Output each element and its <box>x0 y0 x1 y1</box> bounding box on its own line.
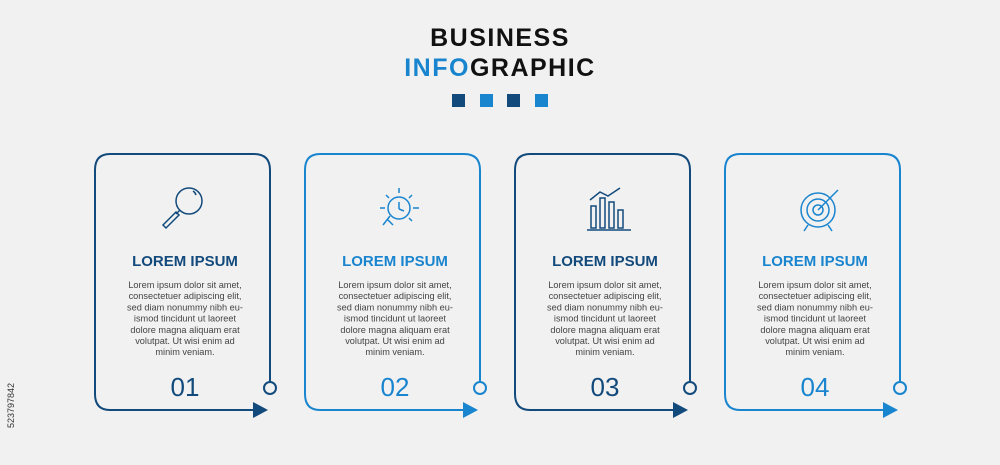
icon: bar chart <box>587 188 631 230</box>
side id text: 523797842 <box>6 383 16 428</box>
text block 3: dolore magna aliquam erat <box>550 325 660 335</box>
text block 2: dolore magna aliquam erat <box>340 325 450 335</box>
text block 1: dolore magna aliquam erat <box>130 325 240 335</box>
text block 4: sed diam nonummy nibh eu- <box>757 302 873 312</box>
title <box>404 24 596 82</box>
text block 4: volutpat. Ut wisi enim ad <box>765 336 865 346</box>
text block 3: consectetuer adipiscing elit, <box>549 291 661 301</box>
text block 3: minim veniam. <box>575 347 635 357</box>
text block 2: Lorem ipsum dolor sit amet, <box>338 280 452 290</box>
squares decoration <box>452 94 548 107</box>
icon: magnifier <box>163 188 202 228</box>
text block 1: sed diam nonummy nibh eu- <box>127 302 243 312</box>
icon: lightbulb <box>380 188 419 225</box>
text block 2: consectetuer adipiscing elit, <box>339 291 451 301</box>
text block 1: volutpat. Ut wisi enim ad <box>135 336 235 346</box>
text block 3: sed diam nonummy nibh eu- <box>547 302 663 312</box>
text block 3: Lorem ipsum dolor sit amet, <box>548 280 662 290</box>
text block 1: Lorem ipsum dolor sit amet, <box>128 280 242 290</box>
number 04: 04 <box>801 372 829 402</box>
heading 2: LOREM IPSUM <box>342 253 448 270</box>
title: INFOGRAPHIC <box>404 54 596 82</box>
heading 4: LOREM IPSUM <box>762 253 868 270</box>
text block 4: consectetuer adipiscing elit, <box>759 291 871 301</box>
text block 2: volutpat. Ut wisi enim ad <box>345 336 445 346</box>
title: BUSINESS <box>430 24 570 52</box>
text block 4: Lorem ipsum dolor sit amet, <box>758 280 872 290</box>
icon: target <box>801 190 838 231</box>
number 02: 02 <box>381 372 409 402</box>
panel: card 4 <box>725 154 906 418</box>
text block 4: ismod tincidunt ut laoreet <box>764 314 867 324</box>
text block 1: consectetuer adipiscing elit, <box>129 291 241 301</box>
panel: card 2 <box>305 154 486 418</box>
text block 3: volutpat. Ut wisi enim ad <box>555 336 655 346</box>
text block 4: minim veniam. <box>785 347 845 357</box>
text block 2: ismod tincidunt ut laoreet <box>344 314 447 324</box>
text block 1: minim veniam. <box>155 347 215 357</box>
text block 1: ismod tincidunt ut laoreet <box>134 314 237 324</box>
text block 2: sed diam nonummy nibh eu- <box>337 302 453 312</box>
heading 1: LOREM IPSUM <box>132 253 238 270</box>
text block 3: ismod tincidunt ut laoreet <box>554 314 657 324</box>
panel: card 3 <box>515 154 696 418</box>
panel: card 1 <box>95 154 276 418</box>
text block 4: dolore magna aliquam erat <box>760 325 870 335</box>
text block 2: minim veniam. <box>365 347 425 357</box>
heading 3: LOREM IPSUM <box>552 253 658 270</box>
number 03: 03 <box>591 372 619 402</box>
number 01: 01 <box>171 372 199 402</box>
